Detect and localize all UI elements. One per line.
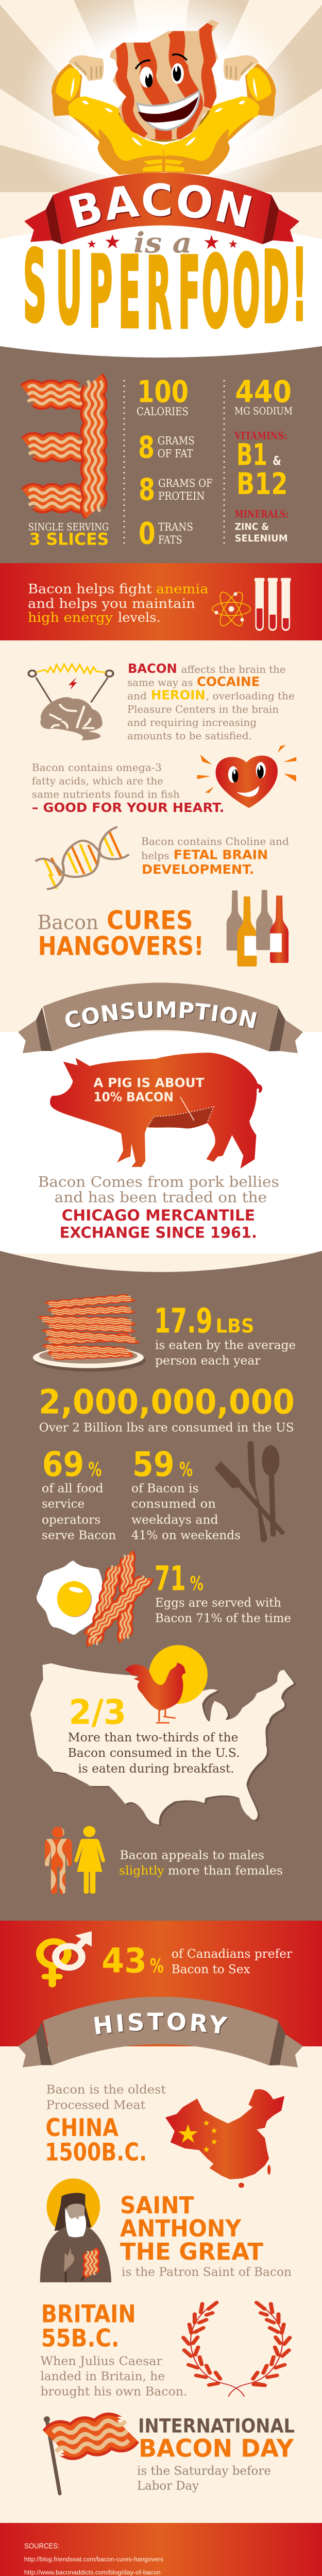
text: cures hangovers: Bacon: [37, 911, 98, 934]
text: International Bacon Day: is the Saturday before: [137, 2464, 271, 2478]
mascot: muscular bacon superhero: [52, 19, 276, 175]
icon: smiling heart: [197, 745, 296, 808]
text: pork bellies: and has been traded on the: [55, 1189, 267, 1206]
trans fats: TRANS: [158, 521, 193, 533]
stat: 69 percent: serve Bacon: [42, 1529, 116, 1542]
serving size: SINGLE SERVING: [28, 520, 109, 533]
vitamins: VITAMINS:: [234, 430, 287, 442]
stat: 59 percent: weekdays and: [131, 1513, 218, 1527]
stat: 59 percent: consumed on: [131, 1498, 216, 1511]
calories: 100: [137, 374, 189, 410]
text: brain effects: BACON: [128, 661, 177, 676]
panel: white consumption background: [0, 1032, 322, 1253]
serving size: [28, 520, 109, 549]
minerals: ZINC &: [235, 521, 269, 532]
text: brain effects: Pleasure Centers in the brain: [127, 703, 279, 715]
text: International Bacon Day: INTERNATIONAL: [138, 2415, 295, 2437]
text: males and females: Bacon appeals to males: [120, 1849, 264, 1862]
text: choline: DEVELOPMENT.: [142, 862, 254, 877]
sodium: 440: [235, 374, 292, 410]
text: choline: [141, 836, 289, 877]
trans fats: FATS: [158, 534, 182, 546]
stat: 69 percent: of all food: [42, 1482, 104, 1496]
title word: BACON: BACON: [69, 183, 252, 229]
icon: atom: [212, 589, 250, 629]
text: males and females: more than females: [168, 1864, 283, 1877]
icon: test tubes: [255, 578, 291, 631]
text: brain effects: , overloading the: [206, 690, 295, 702]
text: brain effects: and requiring increasing: [127, 717, 257, 728]
text: cures hangovers: [37, 905, 204, 961]
calories: CALORIES: [137, 405, 189, 418]
panel: history background: [0, 2046, 322, 2523]
sources list: http://www.baconaddicts.com/blog/day-of-bacon: [24, 2570, 161, 2576]
trans fats: [139, 516, 193, 551]
icon: gender symbols: [40, 1931, 92, 1985]
stat: 59 percent: 41% on weekends: [131, 1529, 241, 1542]
bacon held by the saint: [86, 2251, 96, 2275]
title word: SUPERFOOD!: SUPERFOOD!: [23, 229, 307, 351]
stat: 71 percent: 71: [155, 1559, 186, 1599]
icon: laurel wreath: [183, 2302, 290, 2397]
text: choline: FETAL BRAIN: [174, 848, 268, 862]
stat: two thirds at breakfast: [68, 1692, 240, 1776]
stat: 17.9 lbs: is eaten by the average: [155, 1338, 296, 1352]
text: oldest processed meat: [45, 2083, 166, 2166]
illustration: Saint Anthony: [40, 2178, 111, 2282]
text: Britain 55 B.C.: [40, 2300, 188, 2398]
sources list: http://blog.friendseat.com/bacon-cures-hangovers: [24, 2557, 163, 2563]
fat: OF FAT: [158, 447, 193, 460]
protein: PROTEIN: [158, 490, 205, 502]
text: Saint Anthony the Great: is the Patron Saint of Bacon: [122, 2265, 292, 2279]
icon: rooster and sun: [125, 1645, 208, 1723]
text: brain effects: COCAINE: [197, 674, 260, 689]
anemia text: Bacon helps fight: [28, 582, 152, 597]
stat: 2 billion lbs: 2,000,000,000: [39, 1383, 295, 1421]
sources list: [24, 2557, 302, 2576]
icon: bacon man and yellow woman: [45, 1826, 105, 1894]
icon: brain with electrodes: [28, 664, 113, 740]
stat: 17.9 lbs: person each year: [155, 1354, 261, 1367]
stat: 59 percent: 59: [132, 1445, 175, 1484]
text: pork bellies: Bacon Comes from pork bellies: [38, 1173, 279, 1190]
map: China with stars: [165, 2089, 284, 2188]
stat: 69 percent: service: [42, 1498, 84, 1511]
pig label: 10% BACON: [93, 1090, 174, 1105]
pig label: A PIG IS ABOUT: [93, 1075, 204, 1090]
text: International Bacon Day: BACON DAY: [139, 2434, 294, 2463]
stat: 71 percent: [155, 1559, 291, 1625]
icon: DNA helix: [36, 827, 129, 889]
text: cures hangovers: CURES: [107, 905, 193, 935]
text: brain effects: affects the brain the: [181, 664, 286, 675]
stat: 2 billion lbs: Over 2 Billion lbs are consumed in the US: [39, 1421, 294, 1434]
icon: bacon flag: [44, 2416, 129, 2494]
header background with sun rays: [0, 0, 322, 361]
text: International Bacon Day: Labor Day: [137, 2480, 199, 2493]
anemia text: and helps you maintain: [28, 596, 195, 611]
stat: 43 percent: of Canadians prefer: [172, 1947, 292, 1961]
text: omega-3: – GOOD FOR YOUR HEART.: [32, 800, 224, 815]
stat: 69 percent: 69: [42, 1445, 84, 1484]
text: pork bellies: CHICAGO MERCANTILE: [62, 1207, 255, 1224]
stat: 17.9 lbs: LBS: [215, 1315, 255, 1337]
vitamins: &: [273, 453, 281, 468]
minerals: SELENIUM: [235, 533, 288, 544]
map: United States: [30, 1663, 296, 1826]
title word: BACON: [69, 183, 252, 229]
icon: plate of bacon: [33, 1295, 146, 1371]
fat: [138, 429, 195, 465]
text: choline: Bacon contains Choline and: [141, 836, 289, 848]
text: oldest processed meat: Bacon is the oldest: [46, 2083, 166, 2096]
stat: 59 percent: [131, 1445, 241, 1542]
text: oldest processed meat: Processed Meat: [46, 2098, 146, 2112]
icon: fried egg and bacon: [37, 1555, 150, 1646]
text: Britain 55 B.C.: BRITAIN: [41, 2300, 136, 2328]
text: brain effects: and: [127, 690, 147, 702]
text: brain effects: amounts to be satisfied.: [127, 730, 252, 742]
anemia text: levels.: [118, 610, 161, 625]
minerals: MINERALS:: [234, 507, 289, 520]
text: choline: helps: [141, 850, 170, 862]
text: Saint Anthony the Great: SAINT: [120, 2192, 194, 2219]
sources heading: SOURCES:: [24, 2542, 60, 2551]
anemia text: anemia: [156, 582, 209, 597]
fat: GRAMS: [158, 434, 195, 447]
anemia text: [28, 582, 209, 625]
text: omega-3: [32, 762, 224, 815]
text: Britain 55 B.C.: brought his own Bacon.: [40, 2385, 188, 2398]
dotted dividers: [124, 381, 224, 544]
pig label: [93, 1075, 204, 1105]
text: Britain 55 B.C.: When Julius Caesar: [40, 2355, 162, 2368]
text: Britain 55 B.C.: 55B.C.: [41, 2324, 120, 2352]
text: oldest processed meat: CHINA: [45, 2114, 119, 2142]
heading: history: [94, 2012, 229, 2035]
text: omega-3: fatty acids, which are the: [32, 775, 163, 787]
stat: two thirds at breakfast: is eaten during breakfast.: [78, 1762, 234, 1776]
icon: pig: [50, 1053, 262, 1168]
panel: anemia band: [0, 563, 322, 640]
icon: cutlery: [215, 1441, 282, 1542]
text: oldest processed meat: 1500B.C.: [45, 2138, 147, 2166]
vitamins: B1: [236, 437, 267, 472]
banner: history: [18, 1997, 303, 2067]
sodium: MG SODIUM: [234, 404, 293, 417]
protein: 8: [139, 472, 155, 507]
heading: consumption: CONSUMPTION: [65, 1002, 258, 1029]
fat: 8: [138, 429, 155, 465]
stat: 17.9 lbs: [154, 1301, 296, 1367]
text: Saint Anthony the Great: ANTHONY: [120, 2215, 242, 2242]
panel: brown statistics background: [0, 1251, 322, 1921]
stat: two thirds at breakfast: Bacon consumed in the U.S.: [68, 1747, 240, 1760]
icon: three slices of bacon: [28, 381, 102, 512]
vitamins: [234, 430, 288, 501]
panel: sources: [0, 2523, 322, 2576]
stat: 17.9 lbs: 17.9: [154, 1301, 213, 1341]
text: International Bacon Day: [137, 2415, 295, 2493]
stat: 71 percent: %: [190, 1573, 204, 1595]
ribbon stars: [87, 234, 238, 249]
trans fats: 0: [139, 516, 156, 551]
text: cures hangovers: HANGOVERS!: [38, 931, 204, 961]
vitamins: B12: [236, 466, 288, 501]
text: brain effects: [127, 661, 295, 742]
calories: [137, 374, 189, 418]
stat: 71 percent: Eggs are served with: [155, 1596, 281, 1609]
banner: consumption: [18, 982, 303, 1053]
panel: Canadians band: [0, 1921, 322, 2046]
stat: 69 percent: [42, 1445, 116, 1542]
panel: health effects background: [0, 640, 322, 1032]
title ribbon: [24, 173, 299, 244]
stat: 59 percent: %: [179, 1459, 193, 1481]
stat: 69 percent: operators: [42, 1513, 100, 1527]
anemia text: high energy: [28, 610, 113, 625]
text: Britain 55 B.C.: landed in Britain, he: [40, 2370, 165, 2383]
stat: 43 percent: 43: [101, 1941, 147, 1980]
text: brain effects: HEROIN: [151, 687, 206, 702]
text: omega-3: Bacon contains omega-3: [32, 762, 162, 774]
protein: [139, 472, 213, 507]
stat: 43 percent: Bacon to Sex: [172, 1963, 250, 1976]
stat: two thirds at breakfast: More than two-thirds of the: [68, 1731, 238, 1744]
text: pork bellies: EXCHANGE SINCE 1961.: [60, 1224, 257, 1241]
serving size: 3 SLICES: [29, 530, 109, 549]
text: omega-3: same nutrients found in fish: [32, 788, 180, 800]
text: pork bellies: [38, 1173, 279, 1241]
stat: 71 percent: Bacon 71% of the time: [155, 1612, 291, 1625]
title words: is a: is a: [133, 226, 192, 259]
minerals: [234, 507, 289, 544]
stat: 59 percent: of Bacon is: [131, 1482, 199, 1496]
protein: GRAMS OF: [158, 477, 213, 489]
heading: history: HISTORY: [94, 2012, 229, 2035]
text: brain effects: same way as: [127, 677, 193, 689]
text: males and females: slightly: [119, 1864, 164, 1877]
panel: nutrition stats: [0, 346, 322, 563]
stat: 69 percent: %: [88, 1459, 101, 1481]
stat: 43 percent: [101, 1941, 292, 1980]
stat: two thirds at breakfast: 2/3: [69, 1692, 126, 1732]
text: Saint Anthony the Great: [120, 2192, 292, 2279]
stat: 43 percent: %: [150, 1955, 164, 1977]
text: Saint Anthony the Great: THE GREAT: [120, 2238, 263, 2265]
text: males and females: [119, 1849, 283, 1877]
icon: bottles: [227, 890, 289, 967]
